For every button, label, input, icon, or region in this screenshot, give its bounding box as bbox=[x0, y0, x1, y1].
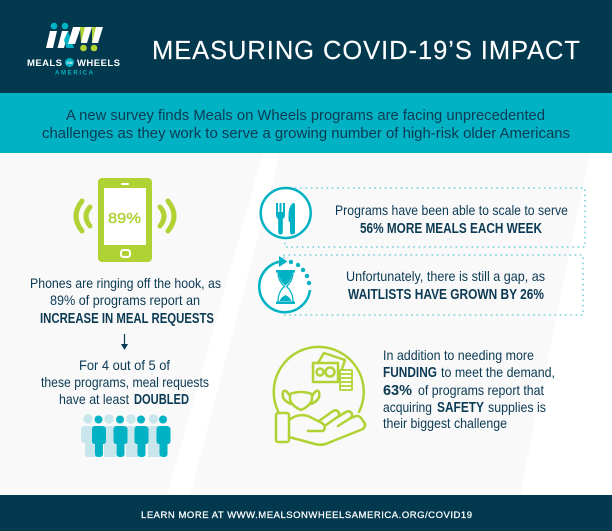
subtitle: challenges as they work to serve a growing number of high-risk older Americans bbox=[42, 126, 570, 142]
text: waitlists: Unfortunately, there is still a gap, as bbox=[346, 268, 545, 284]
text: funding and safety: In addition to needing more bbox=[383, 347, 534, 363]
text: more meals: Programs have been able to scale to serve bbox=[335, 202, 568, 218]
icon: hourglass bbox=[258, 256, 311, 313]
subtitle bbox=[42, 108, 570, 142]
dotted box: meals bbox=[285, 188, 585, 247]
icon: ringing phone bbox=[76, 178, 174, 262]
footer band bbox=[0, 495, 612, 531]
text: funding and safety: to meet the demand, bbox=[441, 364, 555, 380]
logo: AMERICA bbox=[55, 70, 94, 76]
header band bbox=[0, 0, 612, 93]
text: funding and safety: their biggest challenge bbox=[383, 415, 507, 431]
text: more meals: 56% MORE MEALS EACH WEEK bbox=[360, 221, 542, 237]
arrow bbox=[121, 334, 128, 350]
logo: ON bbox=[66, 60, 73, 65]
text: funding and safety: 63% bbox=[383, 383, 412, 399]
text: more meals bbox=[335, 202, 568, 237]
text: funding and safety: acquiring bbox=[383, 399, 432, 415]
icon: ringing phone: 89% bbox=[108, 211, 141, 227]
logo: MEALS bbox=[27, 58, 62, 69]
text: waitlists bbox=[346, 268, 545, 303]
teal subtitle band bbox=[0, 93, 612, 153]
text: funding and safety: FUNDING bbox=[383, 365, 437, 381]
logo: WHEELS bbox=[77, 58, 120, 69]
text: phones ringing: Phones are ringing off the hook, as bbox=[30, 275, 221, 291]
text: doubled: have at least bbox=[59, 391, 129, 407]
logo bbox=[27, 23, 120, 76]
background watermark bbox=[0, 153, 590, 495]
icon: fork and knife bbox=[261, 188, 311, 238]
dotted box: waitlists bbox=[284, 255, 583, 315]
text: funding and safety: supplies is bbox=[488, 399, 546, 415]
text: phones ringing: INCREASE IN MEAL REQUESTS bbox=[40, 311, 214, 327]
text: phones ringing bbox=[30, 275, 221, 327]
text: doubled: these programs, meal requests bbox=[41, 374, 209, 390]
icon: people bbox=[81, 414, 170, 457]
text: doubled: For 4 out of 5 of bbox=[79, 357, 170, 373]
subtitle: A new survey finds Meals on Wheels programs are facing unprecedented bbox=[66, 108, 545, 124]
text: doubled bbox=[41, 357, 209, 408]
text: funding and safety: SAFETY bbox=[437, 400, 484, 416]
text: funding and safety bbox=[383, 347, 555, 431]
title: MEASURING COVID-19’S IMPACT bbox=[152, 37, 580, 65]
footer text: LEARN MORE AT WWW.MEALSONWHEELSAMERICA.ORG/COVID19 bbox=[141, 510, 472, 521]
text: waitlists: WAITLISTS HAVE GROWN BY 26% bbox=[348, 287, 544, 303]
text: funding and safety: of programs report that bbox=[418, 382, 544, 398]
text: doubled: DOUBLED bbox=[134, 392, 189, 408]
text: phones ringing: 89% of programs report an bbox=[50, 292, 200, 308]
icon: hand with mask and money bbox=[274, 347, 365, 445]
